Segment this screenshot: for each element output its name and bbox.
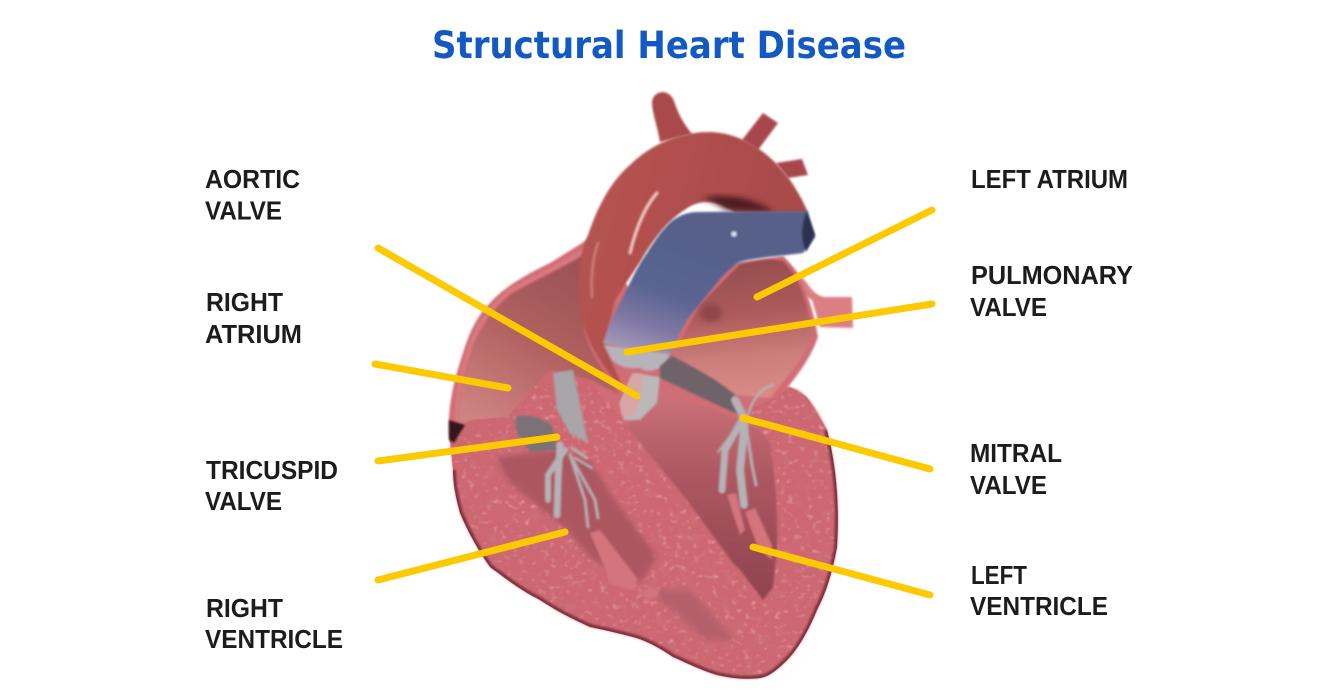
aorta highlights bbox=[592, 193, 657, 297]
pointer: left atrium bbox=[757, 210, 932, 297]
papillary muscles bbox=[590, 493, 772, 598]
pulmonary valve bbox=[604, 345, 670, 371]
atrial rim bbox=[456, 248, 588, 425]
left atrium cavity bbox=[672, 260, 812, 398]
label: mitral valve bbox=[970, 438, 1062, 500]
pulmonary highlight bbox=[731, 231, 737, 237]
pointer: aortic valve bbox=[378, 248, 637, 396]
pointer: right ventricle bbox=[378, 532, 565, 580]
pointer: right atrium bbox=[375, 364, 508, 388]
mitral anterior leaflet bbox=[660, 356, 740, 415]
label: mitral valve: VALVE bbox=[970, 470, 1047, 500]
pointer: tricuspid valve bbox=[378, 437, 557, 461]
heart illustration bbox=[440, 92, 853, 690]
label: aortic valve bbox=[205, 164, 300, 226]
label: left ventricle: VENTRICLE bbox=[970, 591, 1108, 621]
aortic valve tint bbox=[620, 374, 643, 416]
label: left ventricle: LEFT bbox=[971, 560, 1027, 590]
title: Structural Heart Disease bbox=[432, 23, 906, 67]
label: right atrium: ATRIUM bbox=[205, 319, 302, 349]
label: tricuspid valve: TRICUSPID bbox=[206, 455, 338, 485]
heart body: outer wall bbox=[449, 240, 838, 679]
label: left atrium: LEFT ATRIUM bbox=[971, 164, 1128, 194]
pointer: left ventricle bbox=[753, 547, 930, 595]
IVC stump bbox=[449, 420, 465, 443]
right ventricle cavity bbox=[497, 450, 657, 583]
tricuspid anterior leaflet bbox=[515, 416, 557, 452]
label: right ventricle: VENTRICLE bbox=[205, 624, 343, 654]
mitral chordae bbox=[718, 385, 773, 505]
tricuspid septal leaflet bbox=[553, 370, 588, 443]
outer rim shading bbox=[453, 430, 838, 679]
label: right ventricle bbox=[205, 593, 343, 654]
left atrium ostia bbox=[700, 304, 722, 322]
pointer: mitral valve bbox=[743, 418, 930, 469]
label: right atrium: RIGHT bbox=[206, 287, 283, 317]
tricuspid chordae bbox=[548, 445, 598, 527]
label: pulmonary valve bbox=[970, 260, 1133, 322]
label: pulmonary valve: VALVE bbox=[970, 292, 1047, 322]
label: right atrium bbox=[205, 287, 302, 349]
apex folds bbox=[650, 590, 735, 640]
label: aortic valve: AORTIC bbox=[205, 164, 300, 194]
label: tricuspid valve bbox=[205, 455, 338, 516]
label: aortic valve: VALVE bbox=[205, 196, 282, 226]
aorta under-arch shadow bbox=[702, 196, 775, 212]
aortic valve bbox=[620, 373, 660, 420]
pulmonary artery bbox=[603, 211, 815, 354]
label: tricuspid valve: VALVE bbox=[205, 486, 282, 516]
label: mitral valve: MITRAL bbox=[970, 438, 1062, 468]
myocardium light texture bbox=[452, 380, 834, 675]
myocardium dark texture bbox=[490, 435, 826, 652]
ventricular myocardium bbox=[449, 370, 838, 678]
label: right ventricle: RIGHT bbox=[206, 593, 283, 623]
right atrium cavity bbox=[458, 250, 620, 427]
pointer: pulmonary valve bbox=[627, 304, 932, 352]
great vessel branches bbox=[652, 92, 853, 328]
label: pulmonary valve: PULMONARY bbox=[971, 260, 1133, 290]
left ventricle cavity bbox=[627, 390, 777, 600]
label: left ventricle bbox=[970, 560, 1108, 621]
pulmonary artery opening bbox=[802, 211, 815, 252]
aortic arch bbox=[579, 132, 808, 392]
